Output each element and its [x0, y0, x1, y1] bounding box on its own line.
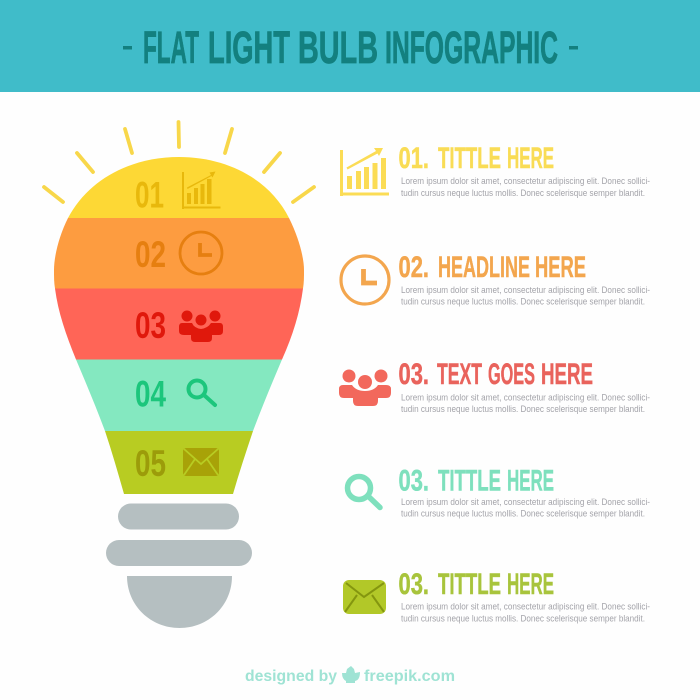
body text 4	[401, 497, 650, 518]
heading 2: 02.	[398, 251, 429, 284]
heading 3	[398, 358, 593, 391]
heading 1: HERE	[507, 142, 554, 175]
item 2	[341, 251, 650, 306]
body text 3: tudin cursus neque luctus mollis. Donec scelerisque semper blandit.	[401, 404, 645, 414]
body text 5: tudin cursus neque luctus mollis. Donec scelerisque semper blandit.	[401, 614, 645, 624]
number 04: 04	[135, 374, 166, 414]
heading 1	[398, 142, 554, 175]
body text 1	[401, 176, 650, 198]
light rays	[44, 122, 314, 202]
footer credit: freepik.com	[364, 668, 455, 685]
heading 4: TITTLE	[438, 464, 501, 498]
body text 2: tudin cursus neque luctus mollis. Donec scelerisque semper blandit.	[401, 296, 645, 306]
heading 4	[398, 464, 554, 498]
heading 4: HERE	[507, 464, 554, 498]
bulb segment 4: mint	[76, 360, 282, 431]
title: FLAT	[143, 22, 199, 73]
title: INFOGRAPHIC	[385, 22, 558, 73]
footer credit: designed by	[245, 668, 337, 685]
item 1	[340, 142, 650, 198]
body text 4: Lorem ipsum dolor sit amet, consectetur adipiscing elit. Donec sollici-	[401, 497, 650, 507]
footer credit	[245, 666, 455, 685]
heading 4: 03.	[398, 464, 429, 498]
icon: magnifier small	[188, 380, 215, 405]
heading 2: HEADLINE	[438, 251, 530, 284]
item 5	[343, 568, 650, 624]
heading 5: 03.	[398, 568, 429, 601]
body text 3: Lorem ipsum dolor sit amet, consectetur adipiscing elit. Donec sollici-	[401, 392, 650, 402]
title: BULB	[298, 22, 378, 73]
body text 2: Lorem ipsum dolor sit amet, consectetur adipiscing elit. Donec sollici-	[401, 285, 650, 295]
light bulb	[54, 157, 304, 494]
heading 5	[398, 568, 554, 601]
icon: envelope	[343, 580, 386, 614]
bulb segment 5: olive	[105, 431, 253, 494]
icon: magnifier	[348, 476, 380, 508]
bulb segment 1: yellow	[68, 157, 289, 218]
icon: people small	[179, 310, 223, 342]
heading 5: TITTLE	[438, 568, 501, 601]
body text 2	[401, 285, 650, 306]
body text 1: Lorem ipsum dolor sit amet, consectetur adipiscing elit. Donec sollici-	[401, 176, 650, 186]
header banner	[0, 0, 700, 92]
number 01: 01	[135, 174, 164, 216]
title: LIGHT	[208, 22, 290, 73]
body text 4: tudin cursus neque luctus mollis. Donec scelerisque semper blandit.	[401, 508, 645, 518]
icon: freepik logo	[342, 666, 360, 683]
icon: clock small	[180, 232, 222, 274]
number 02: 02	[135, 234, 166, 275]
body text 3	[401, 392, 650, 414]
bulb socket	[106, 504, 252, 628]
icon: growth chart	[340, 148, 389, 196]
icon: clock	[341, 256, 389, 304]
heading 1: 01.	[398, 142, 429, 175]
heading 3: TEXT	[437, 358, 482, 391]
body text 5: Lorem ipsum dolor sit amet, consectetur adipiscing elit. Donec sollici-	[401, 602, 650, 612]
heading 3: HERE	[541, 358, 593, 391]
item 4	[348, 464, 650, 518]
body text 5	[401, 602, 650, 624]
number 03: 03	[135, 305, 166, 346]
body text 1: tudin cursus neque luctus mollis. Donec scelerisque semper blandit.	[401, 188, 645, 198]
icon: envelope small	[183, 448, 219, 476]
bulb segment 3: red	[55, 288, 303, 360]
heading 3: GOES	[488, 358, 535, 391]
icon: people	[339, 370, 391, 406]
heading 1: TITTLE	[438, 142, 501, 175]
heading 3: 03.	[398, 358, 429, 391]
heading 2: HERE	[535, 251, 586, 284]
item 3	[339, 358, 650, 414]
icon: growth chart small	[182, 172, 220, 209]
heading 5: HERE	[507, 568, 554, 601]
number 05: 05	[135, 443, 166, 484]
bulb segment 2: orange	[54, 218, 304, 288]
title	[123, 22, 578, 73]
